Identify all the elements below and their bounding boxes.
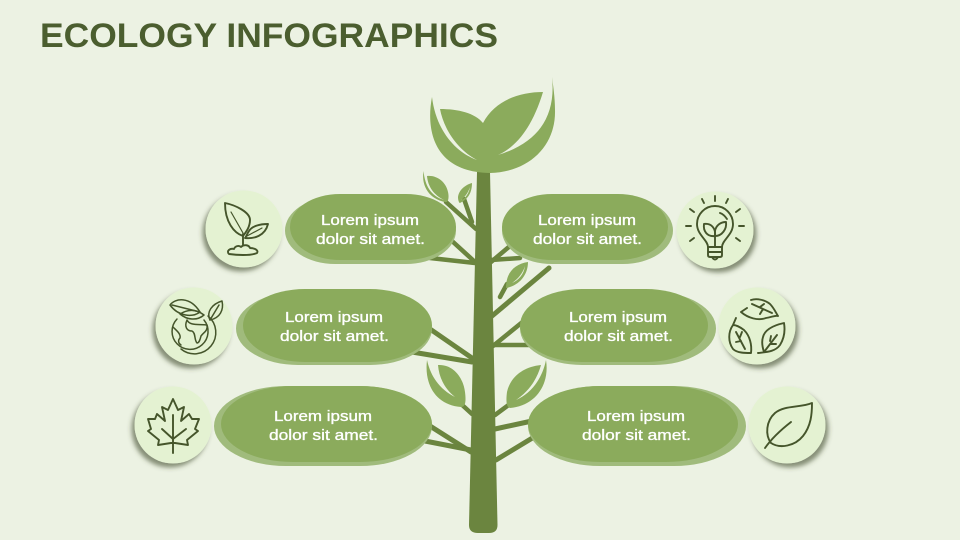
pill: bottom right: [528, 386, 746, 466]
pill: middle left: Lorem ipsum: [285, 309, 383, 326]
pill: top left: dolor sit amet.: [316, 231, 425, 248]
pill: bottom right: Lorem ipsum: [587, 408, 685, 425]
small leaf right: [458, 183, 472, 203]
icon: maple leaf: [134, 386, 212, 464]
trunk: [469, 172, 498, 533]
lower left leaf: [427, 360, 466, 407]
icon: globe with leaves: [156, 288, 232, 364]
pill: bottom right: dolor sit amet.: [582, 427, 691, 444]
pill: bottom left: [214, 386, 432, 466]
pill: middle right: Lorem ipsum: [569, 309, 667, 326]
lower right leaf: [506, 360, 547, 408]
pill: top right: Lorem ipsum: [538, 212, 636, 229]
pill: top left: Lorem ipsum: [321, 212, 419, 229]
middle leaf: [506, 262, 528, 288]
icon: recycling leaves: [718, 288, 796, 364]
pill: middle right: [520, 289, 716, 365]
icon: sprout: [206, 190, 282, 268]
pill: middle left: dolor sit amet.: [280, 328, 389, 345]
pill: middle right: dolor sit amet.: [564, 328, 673, 345]
pill: top right: [502, 194, 673, 264]
pill: top left: [285, 194, 456, 264]
small leaf left: [423, 171, 449, 202]
pill: bottom left: Lorem ipsum: [274, 408, 372, 425]
tree: [412, 77, 555, 533]
pill: bottom left: dolor sit amet.: [269, 427, 378, 444]
pill: top right: dolor sit amet.: [533, 231, 642, 248]
icon: leaf: [748, 386, 826, 464]
pill: middle left: [236, 289, 432, 365]
icon: light bulb: [676, 192, 754, 268]
branches: [412, 199, 549, 460]
title: ECOLOGY INFOGRAPHICS: [40, 17, 498, 55]
top leaves: [430, 77, 555, 173]
